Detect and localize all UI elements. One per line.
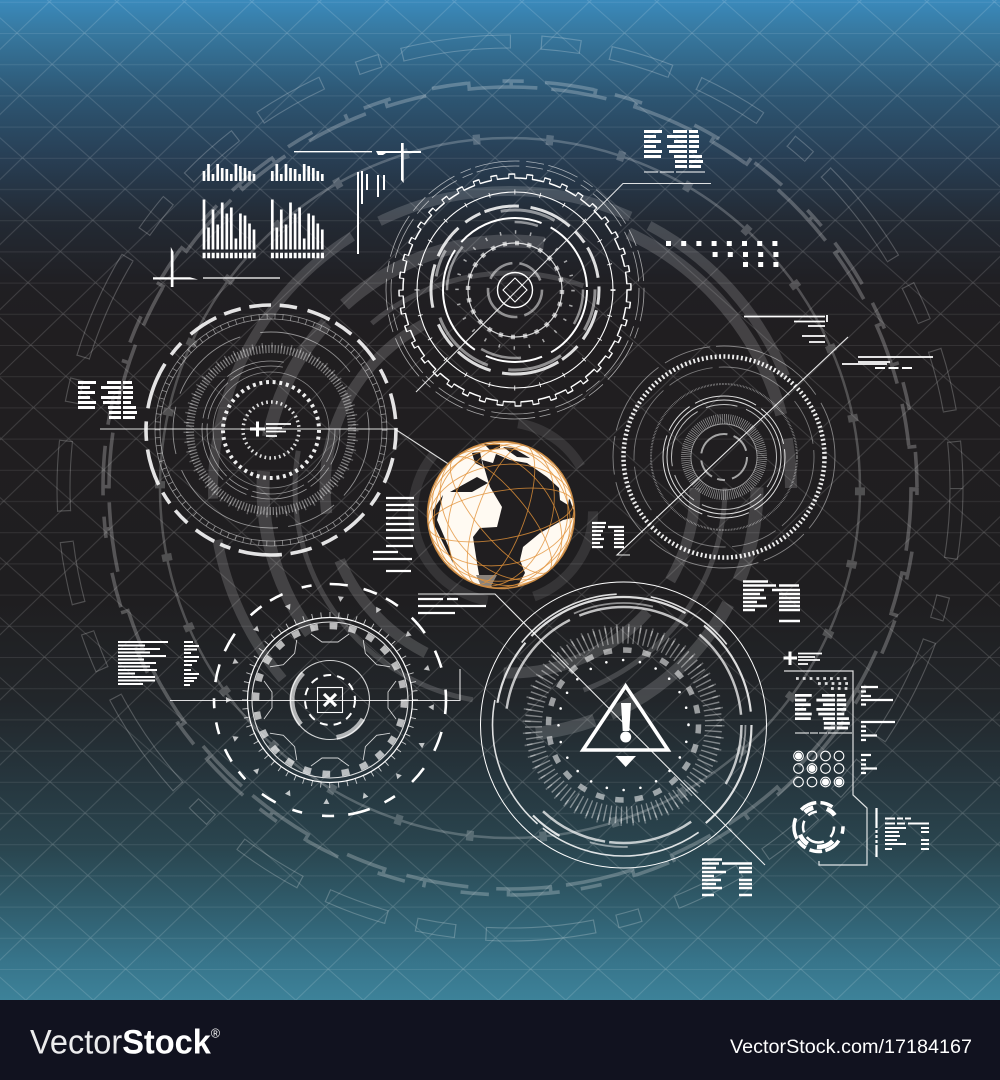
dot rows bbox=[796, 678, 848, 688]
text block: mid right bbox=[743, 582, 800, 621]
radial ticks bbox=[686, 419, 762, 495]
jagged thin ring bbox=[173, 332, 369, 528]
left dial plus marker bbox=[250, 422, 265, 436]
continents bbox=[433, 444, 576, 590]
dotted ring bbox=[243, 402, 299, 458]
segmented arcs inner bbox=[443, 218, 587, 362]
vertical bars near crosshair bbox=[358, 171, 384, 254]
globe bbox=[426, 440, 576, 590]
exclamation mark bbox=[621, 703, 631, 731]
small bars chart 1 bbox=[204, 164, 254, 181]
outer dashes bbox=[214, 584, 446, 816]
text block: left bbox=[78, 382, 137, 418]
dial: left circle bbox=[146, 305, 396, 555]
crosshair top-right bbox=[294, 143, 421, 183]
base squares 1 bbox=[203, 253, 256, 258]
text block: bottom bbox=[702, 860, 752, 895]
outer outlined segments bbox=[57, 35, 963, 941]
footer brand: VectorStock bbox=[30, 1024, 215, 1062]
hatched ring bbox=[223, 382, 319, 478]
globe base bbox=[428, 442, 574, 588]
radial ticks bbox=[534, 635, 714, 815]
thin grey ring bbox=[634, 367, 814, 547]
bar charts bbox=[203, 164, 324, 256]
underline bbox=[795, 732, 852, 734]
hexagon bumps bbox=[256, 626, 404, 774]
toothed circle bbox=[468, 243, 562, 337]
thin ring with ticks bbox=[417, 192, 613, 388]
dotted triangles ring bbox=[457, 232, 573, 348]
globe outline bbox=[428, 442, 574, 588]
fine dotted ring bbox=[651, 384, 797, 530]
thin ticked ring bbox=[160, 138, 860, 838]
center x mark bbox=[324, 694, 336, 706]
white thin rings bbox=[663, 396, 785, 518]
large bars chart 2 bbox=[272, 200, 322, 250]
hatched white ring bbox=[624, 356, 824, 558]
outline ring bbox=[386, 161, 644, 419]
segmented arcs outer bbox=[431, 206, 599, 374]
footer brand: ® bbox=[211, 1026, 220, 1040]
down arrow bbox=[616, 756, 636, 767]
plus label bars bbox=[798, 654, 822, 664]
right dial pointer line bbox=[617, 337, 848, 555]
center square bbox=[318, 688, 342, 712]
bottom-left dial pointer line bbox=[170, 669, 460, 700]
circle matrix bbox=[794, 751, 844, 787]
text block: center small bbox=[592, 523, 624, 547]
grey ring bbox=[488, 263, 542, 317]
thick grey arcs bbox=[292, 662, 368, 738]
outer thin circle bbox=[480, 582, 766, 868]
thin double rings bbox=[248, 618, 412, 782]
icon: alert triangle bbox=[583, 686, 668, 767]
vertical dashed line bbox=[875, 808, 878, 857]
inner circle bbox=[290, 660, 370, 740]
text block: globe label above alert bbox=[418, 599, 486, 613]
dial: bottom-left gear bbox=[214, 584, 446, 816]
right column bars bbox=[861, 687, 895, 773]
jagged white ring bbox=[399, 174, 631, 406]
gear inner lines bbox=[264, 634, 396, 766]
dial: top circle bbox=[386, 161, 644, 419]
text block underline top bbox=[644, 171, 705, 173]
top dial pointer line bbox=[416, 184, 711, 392]
dot ring bbox=[558, 660, 688, 790]
center dashed ring bbox=[701, 434, 747, 480]
dial: alert circle bbox=[480, 582, 766, 868]
text block: bottom-left column bbox=[118, 642, 199, 685]
text block bbox=[795, 695, 850, 728]
center circle bbox=[498, 272, 532, 308]
large bars chart 1 bbox=[204, 200, 254, 250]
radial bars ring bbox=[190, 349, 352, 511]
inner dashes bbox=[305, 675, 355, 725]
plus marker bbox=[784, 652, 797, 665]
small bars chart 2 bbox=[272, 164, 322, 181]
stepped zigzag ring bbox=[103, 81, 917, 895]
ticks ring bbox=[245, 615, 415, 785]
text block: globe labels left bbox=[373, 498, 414, 571]
chain ring bbox=[155, 314, 387, 546]
triangles ring bbox=[226, 596, 434, 804]
outer outline bbox=[613, 346, 835, 568]
footer url: VectorStock.com/17184167 bbox=[730, 1036, 972, 1058]
footer band bbox=[0, 1000, 1000, 1080]
base squares 2 bbox=[271, 253, 324, 258]
large background rings bbox=[57, 35, 963, 941]
parallelogram ring bbox=[548, 650, 698, 800]
right text block bbox=[885, 818, 929, 849]
outer dashes bbox=[146, 305, 396, 555]
top right dot rows bbox=[666, 244, 781, 264]
translucent thick arcs bbox=[213, 191, 807, 785]
text block: top right bbox=[644, 132, 703, 166]
crosshair bottom-left bbox=[153, 247, 280, 287]
left dial label bars bbox=[266, 424, 291, 436]
ring gauge bbox=[794, 802, 843, 852]
left dial pointer line bbox=[100, 429, 450, 465]
right side dashed label bbox=[875, 367, 912, 369]
ring around globe bbox=[413, 422, 593, 602]
panel outline bbox=[784, 671, 867, 865]
inner outlined ring bbox=[202, 361, 340, 499]
orange geodesic grid bbox=[428, 442, 574, 588]
dial: right circle bbox=[613, 346, 835, 568]
ticks base ring bbox=[691, 424, 757, 490]
alert pointer line bbox=[418, 594, 765, 865]
right side label lines bbox=[744, 315, 933, 364]
right detail panel bbox=[784, 652, 929, 865]
center diamond bbox=[503, 278, 527, 302]
outer arcs bbox=[492, 594, 754, 856]
